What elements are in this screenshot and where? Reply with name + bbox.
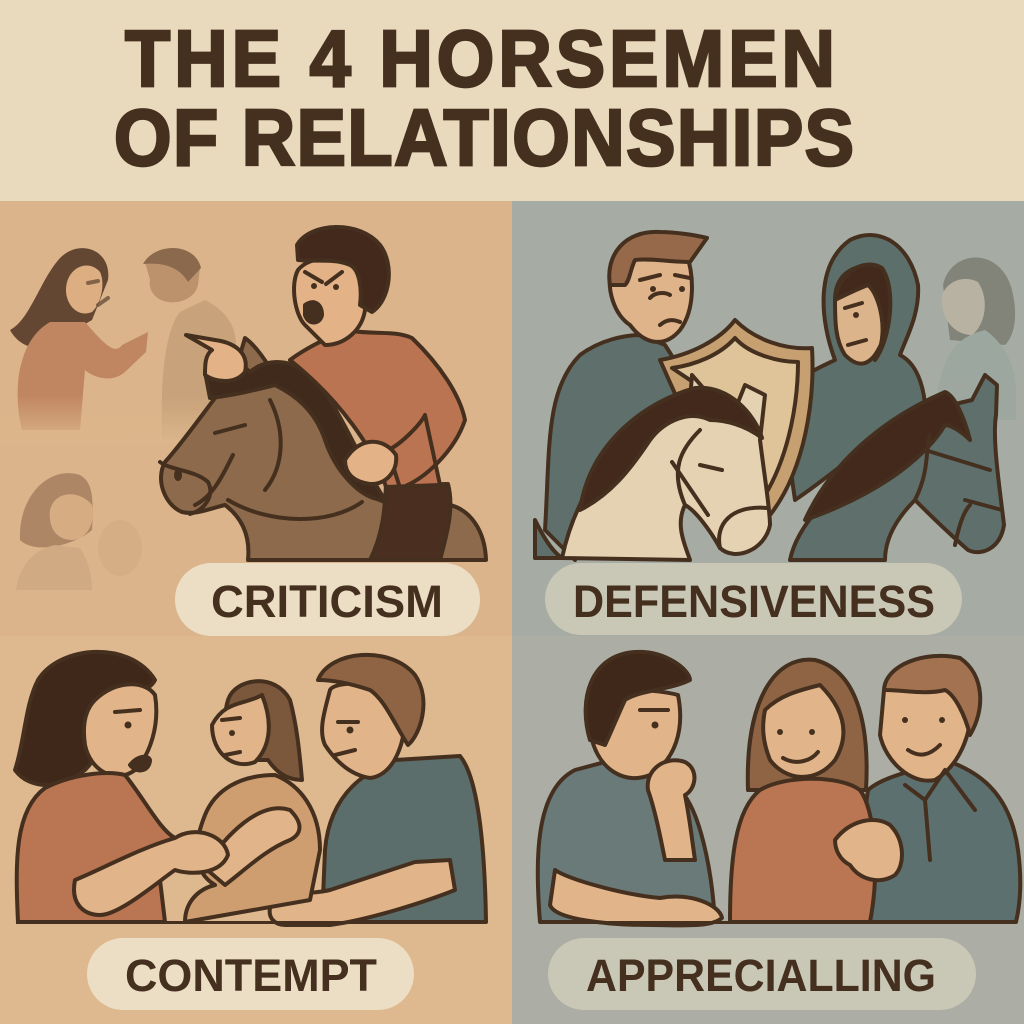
shield — [660, 320, 813, 515]
label: contempt: CONTEMPT — [125, 950, 377, 1001]
label: defensiveness: DEFENSIVENESS — [573, 576, 935, 627]
faded couple arguing — [0, 248, 240, 445]
woman middle — [730, 660, 875, 922]
rider: criticism — [186, 227, 465, 560]
horses: defensiveness — [535, 375, 1004, 560]
label: criticism — [175, 563, 480, 636]
faded woman — [16, 473, 142, 590]
label: criticism: CRITICISM — [211, 576, 443, 627]
woman left — [15, 652, 228, 922]
man left — [538, 652, 722, 925]
man right — [270, 655, 486, 925]
hand on shoulder — [835, 820, 902, 880]
man with shield — [545, 232, 707, 560]
title band — [0, 0, 1024, 201]
label: contempt — [87, 938, 414, 1010]
panel: defensiveness — [512, 201, 1024, 636]
panel: contempt — [0, 636, 512, 1024]
label: appreciating — [548, 938, 976, 1010]
label: appreciating: APPRECIALLING — [586, 950, 936, 1001]
title: THE 4 HORSEMEN — [125, 14, 835, 104]
panel: appreciating — [512, 636, 1024, 1024]
panel: criticism — [0, 201, 512, 636]
woman middle — [185, 681, 320, 922]
table line — [540, 921, 1016, 924]
horse: criticism — [160, 338, 486, 560]
faded woman — [938, 258, 1016, 420]
man right — [850, 656, 1020, 922]
hooded figure — [780, 235, 925, 500]
title: OF RELATIONSHIPS — [114, 93, 854, 183]
title — [114, 14, 854, 183]
table line — [16, 921, 486, 924]
label: defensiveness — [545, 563, 962, 635]
